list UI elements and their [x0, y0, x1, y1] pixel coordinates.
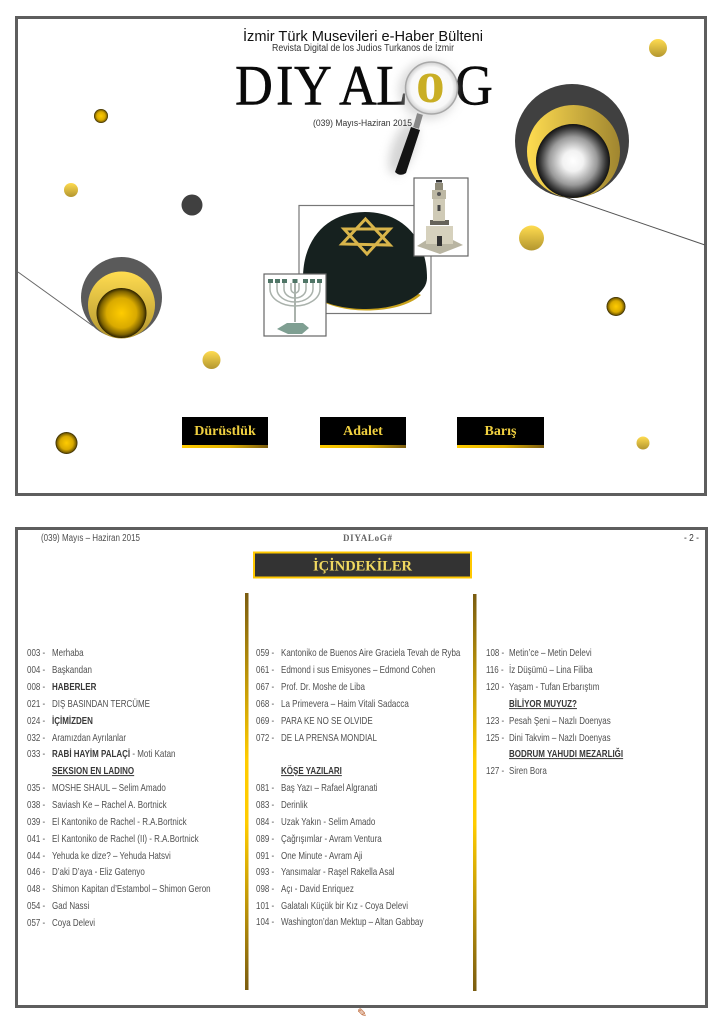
entry: Saviash Ke – Rachel A. Bortnick: [52, 799, 167, 810]
entry: Coya Delevi: [52, 917, 95, 928]
entry: 072 -: [256, 732, 274, 743]
contents column 2: [256, 647, 461, 927]
entry: DIŞ BASINDAN TERCÜME: [52, 698, 150, 709]
button: Adalet: Adalet: [343, 424, 383, 439]
entry: Derinlik: [281, 799, 308, 810]
connector line: right circle to frame: [565, 197, 705, 245]
entry: Washington’dan Mektup – Altan Gabbay: [281, 916, 424, 927]
subtitle: Revista Digital de los Judios Turkanos de İzmir: [272, 41, 455, 54]
entry: Dini Takvim – Nazlı Doenyas: [509, 732, 611, 743]
entry: 108 -: [486, 647, 504, 658]
panel: contents page frame: [16, 528, 706, 1006]
entry: Baş Yazı – Rafael Algranati: [281, 782, 378, 793]
entry: La Primevera – Haim Vitali Sadacca: [281, 698, 410, 709]
entry: 069 -: [256, 715, 274, 726]
newsletter title: İzmir Türk Musevileri e-Haber Bülteni: [243, 27, 483, 45]
image: Izmir clock tower: [414, 178, 468, 256]
section heading: SEKSION EN LADINO: [52, 765, 134, 776]
entry: Kantoniko de Buenos Aire Graciela Tevah de Ryba: [281, 647, 461, 658]
entry: 104 -: [256, 916, 274, 927]
entry: 123 -: [486, 715, 504, 726]
button: Dürüstlük: [182, 417, 268, 448]
entry: 046 -: [27, 866, 45, 877]
logo: DIYALOG with magnifying glass: o: [416, 49, 445, 115]
button: Dürüstlük: Dürüstlük: [194, 424, 256, 439]
entry: İz Düşümü – Lina Filiba: [509, 664, 593, 675]
entry: Pesah Şeni – Nazlı Doenyas: [509, 715, 611, 726]
connector line: left circle to frame: [18, 272, 93, 326]
entry: 024 -: [27, 715, 45, 726]
entry: 127 -: [486, 765, 504, 776]
entry: Yaşam - Tufan Erbarıştım: [509, 681, 599, 692]
entry: Gad Nassi: [52, 900, 89, 911]
entry: 048 -: [27, 883, 45, 894]
panel: cover page frame: [16, 18, 706, 494]
entry: 021 -: [27, 698, 45, 709]
decorative large circle: right: [515, 84, 629, 198]
entry: MOSHE SHAUL – Selim Amado: [52, 782, 166, 793]
entry: 038 -: [27, 799, 45, 810]
entry: Shimon Kapitan d’Estambol – Shimon Geron: [52, 883, 211, 894]
entry: 101 -: [256, 900, 274, 911]
entry: Edmond i sus Emisyones – Edmond Cohen: [281, 664, 435, 675]
entry: Yehuda ke dize? – Yehuda Hatsvi: [52, 850, 171, 861]
entry: 098 -: [256, 883, 274, 894]
heading: contents: [254, 552, 471, 578]
contents column 3: [486, 647, 623, 776]
column divider left: [245, 593, 248, 990]
section heading: BODRUM YAHUDI MEZARLIĞI: [509, 747, 623, 759]
entry: PARA KE NO SE OLVIDE: [281, 715, 373, 726]
contents column 1: [27, 647, 211, 928]
entry: 116 -: [486, 664, 504, 675]
entry: 091 -: [256, 850, 274, 861]
entry: Uzak Yakın - Selim Amado: [281, 816, 375, 827]
entry: Yansımalar - Raşel Rakella Asal: [281, 866, 395, 877]
entry: 089 -: [256, 833, 274, 844]
running header: logo name: DIYALoG#: [343, 533, 392, 543]
entry: 035 -: [27, 782, 45, 793]
entry: 120 -: [486, 681, 504, 692]
entry: 061 -: [256, 664, 274, 675]
entry: HABERLER: [52, 681, 97, 692]
entry: Prof. Dr. Moshe de Liba: [281, 681, 366, 692]
entry: 093 -: [256, 866, 274, 877]
entry: Aramızdan Ayrılanlar: [52, 732, 126, 743]
entry: 054 -: [27, 900, 45, 911]
entry: 003 -: [27, 647, 45, 658]
logo: DIYALOG with magnifying glass: DIYAL: [235, 54, 408, 117]
entry: 039 -: [27, 816, 45, 827]
entry: 032 -: [27, 732, 45, 743]
entry: - Moti Katan: [130, 748, 175, 759]
section heading: KÖŞE YAZILARI: [281, 765, 342, 776]
entry: 083 -: [256, 799, 274, 810]
entry: 067 -: [256, 681, 274, 692]
section heading: BİLİYOR MUYUZ?: [509, 698, 577, 709]
heading: contents: İÇİNDEKİLER: [313, 558, 412, 574]
entry: 057 -: [27, 917, 45, 928]
entry: Metin’ce – Metin Delevi: [509, 647, 592, 658]
entry: 008 -: [27, 681, 45, 692]
button: Barış: Barış: [485, 424, 517, 439]
entry: 125 -: [486, 732, 504, 743]
entry: Çağrışımlar - Avram Ventura: [281, 833, 383, 844]
entry: DE LA PRENSA MONDIAL: [281, 732, 377, 743]
decorative large circle: left: [81, 257, 162, 338]
small circles: [56, 39, 667, 454]
button: Adalet: [320, 417, 406, 448]
page number: - 2 -: [684, 532, 699, 544]
entry: Merhaba: [52, 647, 84, 658]
image: menorah: [264, 274, 326, 336]
entry: El Kantoniko de Rachel - R.A.Bortnick: [52, 816, 187, 827]
entry: 068 -: [256, 698, 274, 709]
image: kippah with star of David: [299, 206, 431, 314]
entry: Başkandan: [52, 664, 92, 675]
entry: 004 -: [27, 664, 45, 675]
entry: Siren Bora: [509, 765, 548, 776]
entry: 081 -: [256, 782, 274, 793]
issue date: (039) Mayıs-Haziran 2015: [313, 118, 412, 129]
entry: İÇİMİZDEN: [52, 715, 93, 726]
running header: date: (039) Mayıs – Haziran 2015: [41, 533, 140, 544]
logo: DIYALOG with magnifying glass: G: [455, 54, 493, 117]
entry: 084 -: [256, 816, 274, 827]
logo: DIYALOG with magnifying glass: [235, 49, 493, 178]
icon: footer pencil hand: ✎: [357, 1006, 367, 1020]
column divider right: [473, 594, 476, 991]
entry: 033 -: [27, 748, 45, 759]
entry: 041 -: [27, 833, 45, 844]
entry: RABİ HAYİM PALAÇİ: [52, 748, 130, 759]
entry: El Kantoniko de Rachel (II) - R.A.Bortnick: [52, 833, 199, 844]
entry: Galatalı Küçük bir Kız - Coya Delevi: [281, 900, 408, 911]
entry: 059 -: [256, 647, 274, 658]
entry: Açı - David Enriquez: [281, 883, 354, 894]
entry: 044 -: [27, 850, 45, 861]
entry: D’aki D’aya - Eliz Gatenyo: [52, 866, 145, 877]
button: Barış: [457, 417, 544, 448]
entry: One Minute - Avram Aji: [281, 850, 363, 861]
